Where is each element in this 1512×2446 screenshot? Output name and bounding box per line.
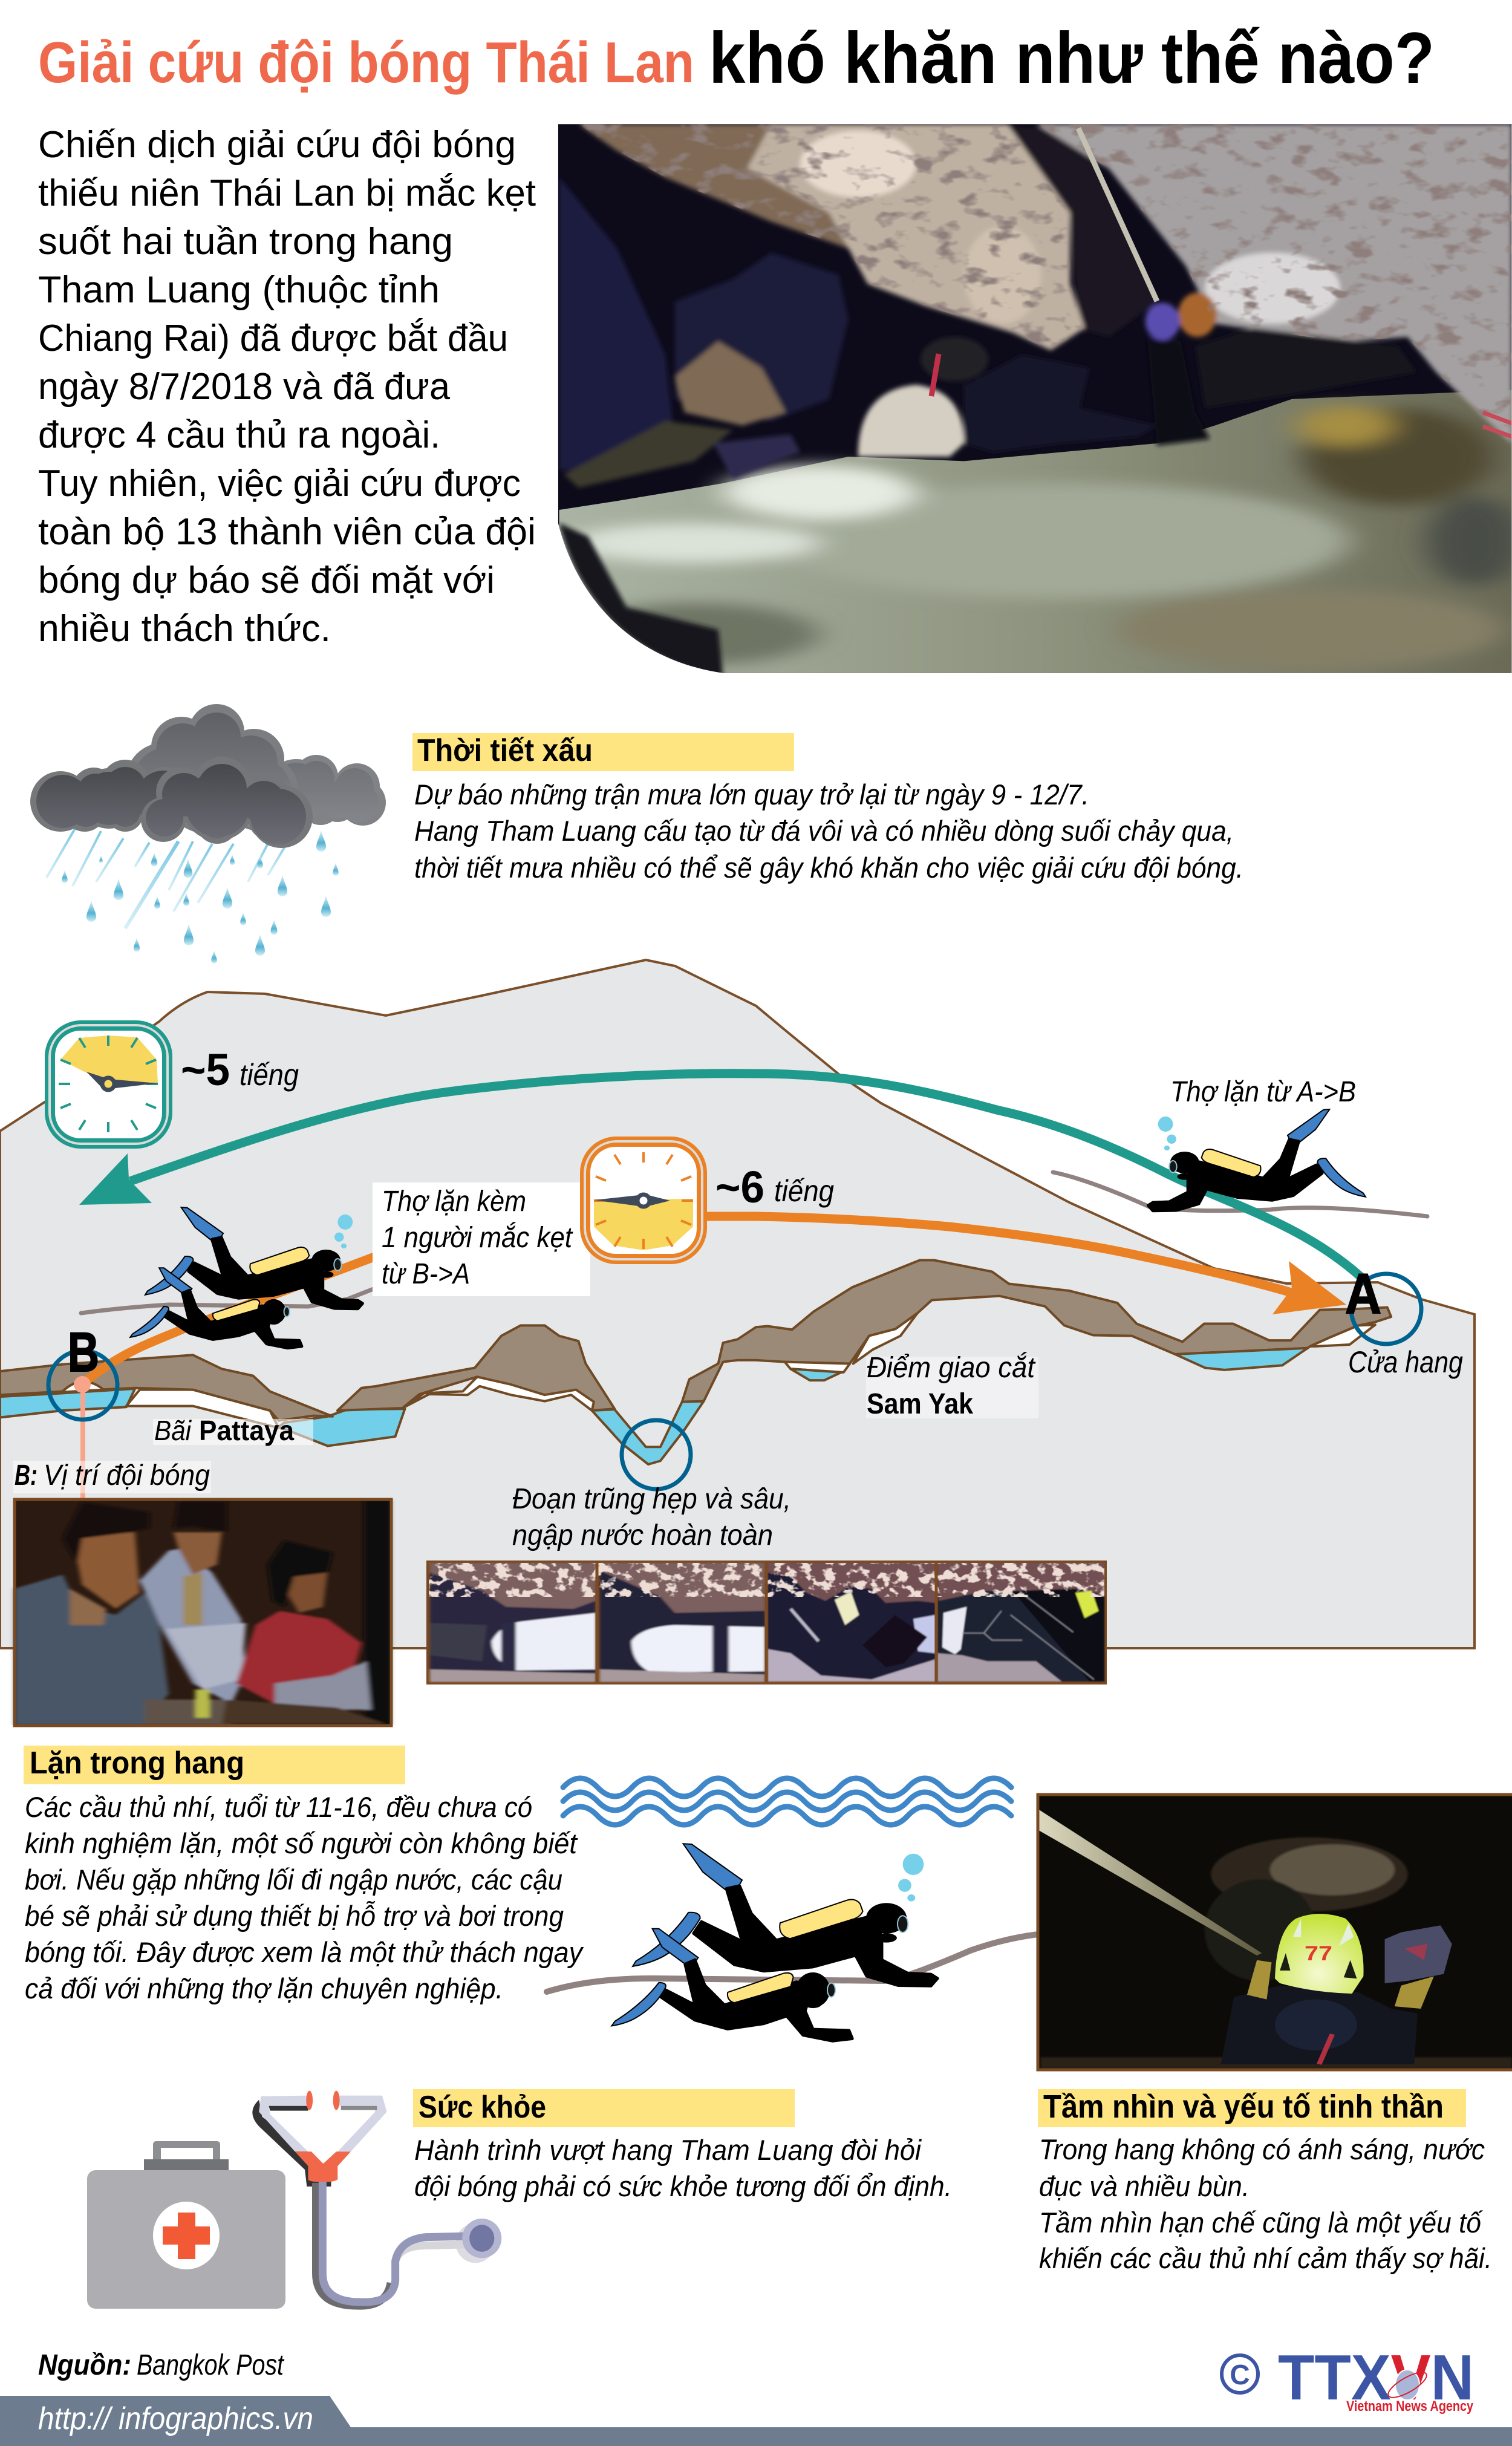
text: diving body: bé sẽ phải sử dụng thiết bị hỗ trợ và bơi trong: [25, 1900, 564, 1932]
text: diving body: Các cầu thủ nhí, tuổi từ 11-16, đều chưa có: [25, 1791, 532, 1823]
marker ring B: [48, 1351, 117, 1420]
divers pair: [611, 1844, 937, 2041]
orange route arrow to A: [704, 1216, 1346, 1314]
icon: stethoscope: [252, 2091, 501, 2306]
source: Bangkok Post: [137, 2349, 284, 2381]
text: diving body: bóng tối. Đây được xem là một thử thách ngay: [25, 1936, 584, 1968]
text: diving body: bơi. Nếu gặp những lối đi ngập nước, các cậu: [25, 1864, 562, 1896]
main photo: divers in flooded cave: [556, 121, 1512, 678]
label: ~5 hours: [181, 1045, 299, 1095]
label: ~6 hours: tiếng: [774, 1174, 834, 1208]
label: narrow dip: Đoạn trũng hẹp và sâu,: [512, 1483, 791, 1515]
teal route arrow A to B: [79, 1074, 1368, 1283]
intro text: toàn bộ 13 thành viên của đội: [38, 511, 536, 553]
intro text: bóng dự báo sẽ đối mặt với: [38, 559, 495, 601]
heading: bad weather: [412, 733, 794, 771]
guide rope: [547, 1934, 1038, 1992]
logo: TTXVN: C: [1230, 2359, 1250, 2390]
panel: diving in the cave: [24, 1746, 1038, 2041]
label: Pattaya beach: Pattaya: [199, 1415, 294, 1446]
label: team position: B:: [15, 1459, 37, 1492]
heading: diving: Lặn trong hang: [30, 1746, 244, 1781]
photo: rescuer with helmet and rope: [1037, 1793, 1512, 2071]
icon: storm cloud with rain: [30, 704, 386, 964]
text: health body: [414, 2134, 952, 2202]
icon: first aid kit: [87, 2141, 285, 2309]
clock: 5 hours: [45, 1020, 172, 1149]
label: ~6 hours: [715, 1162, 834, 1212]
text: diving body: cả đối với những thợ lặn chuyên nghiệp.: [25, 1972, 503, 2004]
text: bad weather body: Dự báo những trận mưa lớn quay trở lại từ ngày 9 - 12/7.: [414, 778, 1089, 810]
intro text: suốt hai tuần trong hang: [38, 221, 453, 263]
orange route B to A, lower part: [82, 1252, 387, 1384]
panel: bad weather: [30, 704, 1243, 964]
text: diving body: [25, 1791, 584, 2004]
icon: water waves: [563, 1778, 1011, 1825]
label: narrow dip: [512, 1483, 791, 1551]
logo: TTXVN: Vietnam News Agency: [1346, 2398, 1474, 2415]
intro text: [38, 124, 536, 650]
label: guide diver: [373, 1182, 590, 1296]
label: guide diver: từ B->A: [382, 1258, 470, 1290]
label: diver A to B: Thợ lặn từ A->B: [1170, 1076, 1356, 1108]
panel: cave cross-section diagram: [0, 960, 1475, 1648]
label: guide diver: 1 người mắc kẹt: [382, 1222, 573, 1254]
label: ~5 hours: tiếng: [240, 1058, 299, 1092]
intro text: Chiang Rai) đã được bắt đầu: [38, 318, 508, 359]
label: Sam Yak junction: Điểm giao cắt: [867, 1352, 1036, 1384]
photo strip: diver carrying through flooded section: [426, 1561, 1107, 1684]
heading: health: [413, 2089, 795, 2127]
text: health body: đội bóng phải có sức khỏe tương đối ổn định.: [414, 2170, 952, 2202]
photo: rescuer with helmet and rope: 77: [1305, 1942, 1332, 1965]
letter B: B: [68, 1322, 99, 1383]
footer bar: [0, 2396, 1512, 2446]
photo: trapped team: [15, 1499, 391, 1726]
label: cave entrance: Cửa hang: [1348, 1345, 1463, 1379]
text: visibility body: Trong hang không có ánh sáng, nước: [1039, 2133, 1485, 2165]
diver A to B: [1148, 1109, 1366, 1211]
text: bad weather body: [414, 778, 1243, 884]
label: Pattaya beach: Bãi: [154, 1415, 192, 1446]
intro text: ngày 8/7/2018 và đã đưa: [38, 366, 451, 408]
source: [38, 2349, 284, 2381]
strip photo 4: [937, 1563, 1104, 1681]
intro text: nhiều thách thức.: [38, 608, 331, 650]
panel: visibility and morale: [1038, 2089, 1492, 2274]
intro text: Tham Luang (thuộc tỉnh: [38, 269, 440, 311]
heading: visibility: Tầm nhìn và yếu tố tinh thần: [1043, 2089, 1444, 2125]
text: bad weather body: Hang Tham Luang cấu tạo từ đá vôi và có nhiều dòng suối chảy qua,: [414, 815, 1234, 847]
guide rope left: [81, 1288, 375, 1313]
footer bar: http:// infographics.vn: [38, 2401, 313, 2436]
strip photo 1: [430, 1563, 596, 1682]
text: visibility body: [1039, 2133, 1492, 2274]
label: team position: Vị trí đội bóng: [44, 1459, 210, 1492]
title: [38, 18, 1435, 99]
text: visibility body: Tầm nhìn hạn chế cũng là một yếu tố: [1039, 2206, 1484, 2239]
intro text: thiếu niên Thái Lan bị mắc kẹt: [38, 172, 536, 214]
photo: rock texture: [579, 125, 1512, 427]
label: narrow dip: ngập nước hoàn toàn: [512, 1519, 773, 1551]
label: ~5 hours: ~5: [181, 1045, 230, 1095]
label: guide diver: Thợ lặn kèm: [382, 1185, 526, 1218]
intro text: Tuy nhiên, việc giải cứu được: [38, 463, 521, 504]
heading: health: Sức khỏe: [419, 2090, 546, 2125]
guide rope right: [1053, 1172, 1427, 1216]
heading: diving: [24, 1746, 405, 1784]
label: Pattaya beach: [153, 1415, 313, 1446]
text: visibility body: khiến các cầu thủ nhí cảm thấy sợ hãi.: [1039, 2242, 1492, 2274]
logo: TTXVN: TTXVN: [1278, 2342, 1474, 2413]
label: Sam Yak junction: [866, 1352, 1038, 1420]
title: Giải cứu đội bóng Thái Lan: [38, 30, 694, 95]
intro text: Chiến dịch giải cứu đội bóng: [38, 124, 516, 166]
strip photo 3: [768, 1563, 936, 1681]
strip rock texture: [429, 1563, 1104, 1597]
text: visibility body: đục và nhiều bùn.: [1039, 2170, 1250, 2202]
text: health body: Hành trình vượt hang Tham Luang đòi hỏi: [414, 2134, 922, 2166]
clock: 6 hours: [580, 1137, 707, 1264]
text: diving body: kinh nghiệm lặn, một số người còn không biết: [25, 1827, 578, 1859]
letter A: A: [1345, 1262, 1381, 1325]
label: ~6 hours: ~6: [715, 1162, 764, 1212]
source: Nguồn:: [38, 2349, 131, 2381]
panel: health: [87, 2089, 952, 2309]
intro text: được 4 cầu thủ ra ngoài.: [38, 414, 440, 456]
heading: bad weather: Thời tiết xấu: [417, 733, 593, 768]
marker ring dip: [622, 1420, 691, 1489]
title: khó khăn như thế nào?: [709, 18, 1435, 99]
marker ring A: [1351, 1274, 1421, 1344]
mountain silhouette: [0, 960, 1475, 1648]
label: Sam Yak junction: Sam Yak: [867, 1388, 973, 1420]
divers pair B to A: [130, 1207, 362, 1348]
cave tunnel rock and water: [0, 1260, 1391, 1464]
marker: B position pin: [74, 1376, 91, 1499]
text: bad weather body: thời tiết mưa nhiều có thể sẽ gây khó khăn cho việc giải cứu đội bóng.: [414, 852, 1243, 884]
strip photo 2: [599, 1563, 765, 1682]
